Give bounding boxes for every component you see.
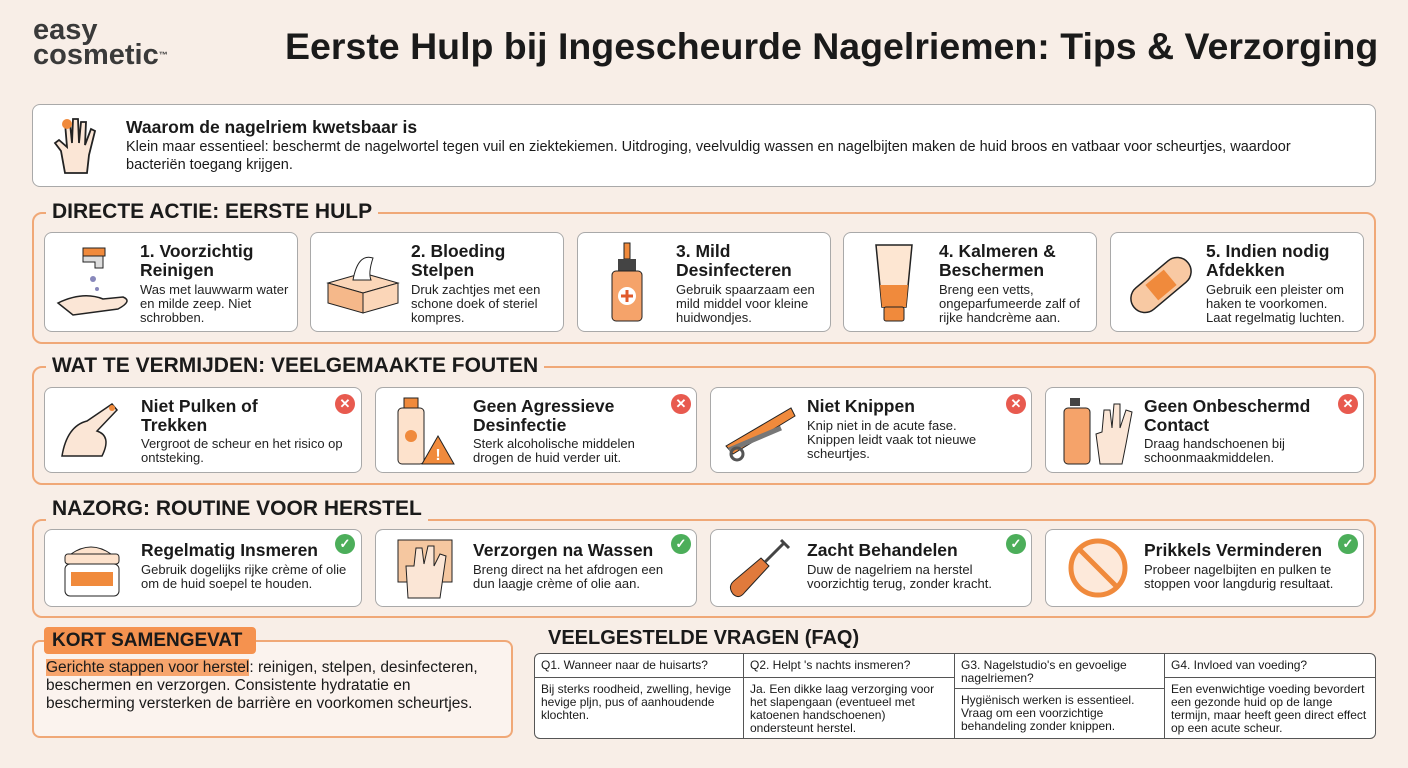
icon: tissue box xyxy=(326,256,400,314)
card: pulken: Niet Pulken of xyxy=(141,396,258,416)
card: knippen: ✕ xyxy=(1011,396,1021,411)
card: knippen: Knip niet in de acute fase. Knippen leidt vaak tot nieuwe scheurtjes. xyxy=(807,418,976,461)
logo xyxy=(33,14,168,71)
card 2: 2. Bloeding xyxy=(411,241,505,261)
card 3: Desinfecteren xyxy=(676,260,792,280)
card: contact: Contact xyxy=(1144,415,1209,435)
panel: nazorg xyxy=(32,519,1376,618)
logo: easy xyxy=(33,14,98,46)
card 5: 5. Indien nodig xyxy=(1206,241,1329,261)
logo: cosmetic™ xyxy=(33,39,168,71)
icon: soap and glove xyxy=(1064,398,1133,464)
panel: summary xyxy=(32,640,513,738)
card: insmeren: Gebruik dogelijks rijke crème of olie om de huid soepel te houden. xyxy=(141,562,346,591)
card: pulken: Trekken xyxy=(141,415,207,435)
card: desinfectie xyxy=(375,387,697,473)
card: wassen: Breng direct na het afdrogen een dun laagje crème of olie aan. xyxy=(473,562,663,591)
card 2: Stelpen xyxy=(411,260,474,280)
card 3: Gebruik spaarzaam een mild middel voor kleine huidwondjes. xyxy=(676,282,815,325)
panel: vermijden xyxy=(32,366,1376,485)
card: zacht: ✓ xyxy=(1011,536,1021,551)
card: wassen: ✓ xyxy=(676,536,686,551)
icon: fingers xyxy=(61,403,118,457)
icon: bottle warning: ! xyxy=(435,447,441,464)
card: wassen: Verzorgen na Wassen xyxy=(473,540,653,560)
card: zacht xyxy=(710,529,1032,607)
icon: dropper bottle xyxy=(612,242,642,322)
card 1: Was met lauwwarm water en milde zeep. Niet schrobben. xyxy=(140,282,288,325)
card: contact: Draag handschoenen bij schoonmaakmiddelen. xyxy=(1144,436,1285,465)
card: desinfectie: Geen Agressieve xyxy=(473,396,614,416)
faq table: G3. Nagelstudio's en gevoelige nagelriemen? xyxy=(961,658,1127,685)
card 4: Beschermen xyxy=(939,260,1044,280)
summary text: Gerichte stappen voor herstel: reinigen, stelpen, desinfecteren, beschermen en verzorgen. Consistente hydratatie en bescherming versterken de barrière en voorkomen scheurtjes. xyxy=(46,659,478,712)
card: knippen: Niet Knippen xyxy=(807,396,915,416)
card: prikkels: Prikkels Verminderen xyxy=(1144,540,1322,560)
card: prikkels: Probeer nagelbijten en pulken te stoppen voor langdurig resultaat. xyxy=(1144,562,1333,591)
intro text xyxy=(126,117,1291,173)
heading: vermijden: WAT TE VERMIJDEN: VEELGEMAAKTE FOUTEN xyxy=(52,354,538,377)
icon: clipper xyxy=(725,407,796,462)
card: prikkels xyxy=(1045,529,1364,607)
intro panel xyxy=(32,104,1376,187)
card: desinfectie: Desinfectie xyxy=(473,415,566,435)
heading: nazorg: NAZORG: ROUTINE VOOR HERSTEL xyxy=(52,497,422,520)
card: desinfectie: Sterk alcoholische middelen drogen de huid verder uit. xyxy=(473,436,635,465)
card: pulken: Vergroot de scheur en het risico op ontsteking. xyxy=(141,436,343,465)
icon: cream jar xyxy=(64,546,120,596)
card: wassen xyxy=(375,529,697,607)
panel: directe actie xyxy=(32,212,1376,344)
heading: directe actie: DIRECTE ACTIE: EERSTE HULP xyxy=(52,200,372,223)
card: zacht: Zacht Behandelen xyxy=(807,540,958,560)
card 5: Gebruik een pleister om haken te voorkomen. Laat regelmatig luchten. xyxy=(1206,282,1345,325)
card 5 xyxy=(1110,232,1364,332)
card: zacht: Duw de nagelriem na herstel voorzichtig terug, zonder kracht. xyxy=(807,562,992,591)
heading: summary xyxy=(44,627,256,654)
title: Eerste Hulp bij Ingescheurde Nagelriemen: Tips & Verzorging xyxy=(285,25,1378,67)
faq table xyxy=(534,653,1376,739)
card 3 xyxy=(577,232,831,332)
heading: summary: KORT SAMENGEVAT xyxy=(52,630,242,651)
card: pulken xyxy=(44,387,362,473)
card 2 xyxy=(310,232,564,332)
card 2: Druk zachtjes met een schone doek of steriel kompres. xyxy=(411,282,540,325)
card 3: 3. Mild xyxy=(676,241,730,261)
faq table: Een evenwichtige voeding bevordert een gezonde huid op de lange termijn, maar heeft geen direct effect op een acute scheur. xyxy=(1171,682,1366,735)
card: contact xyxy=(1045,387,1364,473)
card 5: Afdekken xyxy=(1206,260,1285,280)
icon: tap xyxy=(56,248,128,316)
card 4 xyxy=(843,232,1097,332)
card: contact: ✕ xyxy=(1343,396,1353,411)
card: contact: Geen Onbeschermd xyxy=(1144,396,1310,416)
card: insmeren: ✓ xyxy=(340,536,350,551)
card: insmeren xyxy=(44,529,362,607)
icon: no sign xyxy=(1068,538,1128,598)
faq table: Hygiënisch werken is essentieel. Vraag om een voorzichtige behandeling zonder knippen. xyxy=(961,693,1134,733)
card: pulken: ✕ xyxy=(340,396,350,411)
icon: hand xyxy=(54,118,96,174)
card 1: Reinigen xyxy=(140,260,214,280)
card 1 xyxy=(44,232,298,332)
intro text: Klein maar essentieel: beschermt de nagelwortel tegen vuil en ziektekiemen. Uitdroging, veelvuldig wassen en nagelbijten maken de huid broos en vatbaar voor scheurtjes, waardoor bacteriën toegang krijgen. xyxy=(126,139,1291,173)
faq table: Bij sterks roodheid, zwelling, hevige hevige pljn, pus of aanhoudende klochten. xyxy=(541,682,731,722)
icon: bottle warning xyxy=(398,398,455,464)
card 4: 4. Kalmeren & xyxy=(939,241,1056,261)
icon: plaster xyxy=(1130,256,1192,314)
card 1: 1. Voorzichtig xyxy=(140,241,253,261)
card 4: Breng een vetts, ongeparfumeerde zalf of rijke handcrème aan. xyxy=(939,282,1080,325)
faq table: G4. Invloed van voeding? xyxy=(1171,658,1307,672)
icon: towel hand xyxy=(398,540,452,598)
faq table: Q2. Helpt 's nachts insmeren? xyxy=(750,658,910,672)
icon: tube xyxy=(875,244,913,322)
faq table: Ja. Een dikke laag verzorging voor het slapengaan (eventueel met katoenen handschoenen) ondersteunt herstel. xyxy=(750,682,934,735)
card: prikkels: ✓ xyxy=(1343,536,1353,551)
heading: faq: VEELGESTELDE VRAGEN (FAQ) xyxy=(548,627,859,649)
icon: pusher xyxy=(730,539,790,598)
card: insmeren: Regelmatig Insmeren xyxy=(141,540,318,560)
faq table: Q1. Wanneer naar de huisarts? xyxy=(541,658,708,672)
card: knippen xyxy=(710,387,1032,473)
intro text: Waarom de nagelriem kwetsbaar is xyxy=(126,117,417,137)
card: desinfectie: ✕ xyxy=(676,396,686,411)
